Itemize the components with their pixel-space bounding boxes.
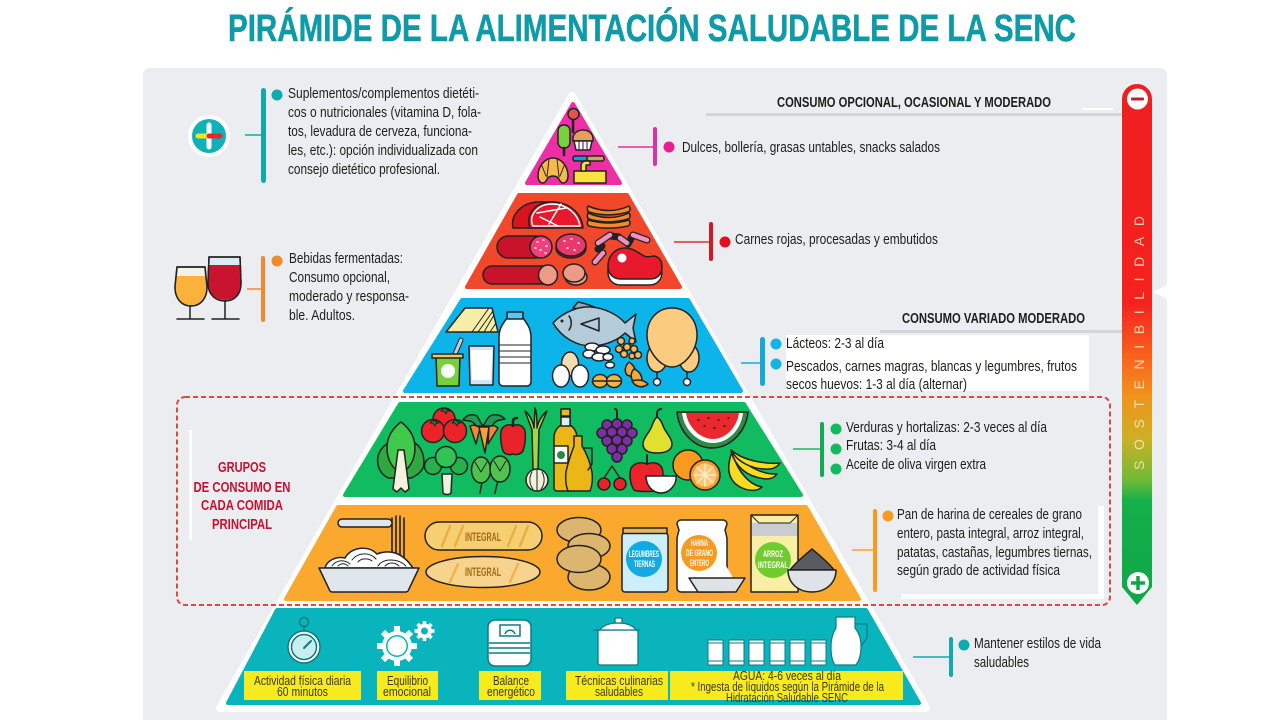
icon: pepper [501, 418, 525, 455]
label: agua: * Ingesta de líquidos según la Pirámide de la [691, 680, 884, 694]
icon: jar of legumes: TIERNAS [634, 559, 655, 569]
callout: estilos de vida: Mantener estilos de vida [974, 636, 1102, 652]
tier: carnes [467, 195, 680, 287]
icon: oranges [673, 450, 720, 490]
label: grupos de consumo: CADA COMIDA [201, 498, 283, 514]
label: grupos de consumo: DE CONSUMO EN [194, 480, 290, 496]
callout: suplementos: tos, levadura de cerveza, funciona- [288, 124, 472, 140]
callout: bebidas fermentadas: moderado y responsa- [289, 289, 409, 305]
icon: pasta bowl [319, 548, 419, 592]
callout: carnes [674, 222, 938, 261]
icon: flour bag: ENTERO [690, 558, 709, 568]
icon: popsicle [558, 125, 570, 155]
icon: milk bottle [499, 312, 531, 386]
heading: consumo variado [880, 311, 1123, 333]
callout: verduras y frutas: Verduras y hortalizas: 2-3 veces al día [846, 420, 1048, 436]
callout: cereales: Pan de harina de cereales de grano [897, 507, 1082, 523]
callout: suplementos: les, etc.): opción individualizada con [288, 143, 478, 159]
callout: bebidas fermentadas: Bebidas fermentadas: [289, 251, 403, 267]
label: actividad física: Actividad física diaria [254, 674, 351, 688]
label: equilibrio emocional [377, 671, 438, 700]
icon: salami slices [563, 264, 587, 285]
icon: knife [573, 156, 604, 161]
callout: suplementos icon [188, 115, 230, 157]
icon: croissant [538, 158, 568, 183]
icon: plus [1127, 572, 1149, 594]
icon: fork [338, 516, 404, 566]
icon: almond wedges [625, 362, 648, 387]
label: técnicas culinarias [566, 671, 668, 700]
icon: chicken [647, 308, 699, 386]
icon: pear [643, 409, 672, 453]
heading: consumo variado: CONSUMO VARIADO MODERADO [902, 311, 1085, 327]
sustainability bar [1122, 84, 1167, 605]
icon: steak [608, 248, 662, 285]
label: grupos de consumo: GRUPOS [218, 460, 266, 476]
icon: bowl of rice [788, 549, 836, 592]
icon: stopwatch [288, 618, 320, 663]
callout: bebidas fermentadas: Consumo opcional, [289, 270, 390, 286]
icon: peanuts [592, 374, 622, 388]
heading: consumo opcional [706, 95, 1123, 116]
icon: broccoli [424, 446, 468, 494]
icon: eggs [552, 352, 588, 387]
icon: brown rice box [751, 515, 798, 592]
callout: lácteos y proteínas: Lácteos: 2-3 al día [786, 336, 885, 352]
icon: brown rice box: INTEGRAL [758, 560, 788, 570]
icon: muffin [573, 130, 593, 150]
label: técnicas culinarias: saludables [595, 685, 643, 699]
icon: nuts [616, 338, 642, 359]
callout: lácteos y proteínas [741, 335, 1089, 393]
icon: wine glasses [175, 257, 241, 319]
icon: chard [378, 422, 424, 492]
tier: estilos de vida [228, 610, 919, 705]
pyramid silhouette [220, 96, 926, 708]
icon: minus [1127, 88, 1148, 110]
icon: bowl of flour [689, 560, 745, 592]
callout: estilos de vida [913, 636, 1102, 677]
icon: flour bag: DE GRANO [686, 548, 713, 558]
label: balance energético: Balance [493, 674, 529, 688]
icon: jar of legumes: LEGUMBRES [629, 549, 659, 559]
label: agua [670, 669, 903, 705]
tier: dulces [527, 104, 620, 183]
icon: olive oil bottle [554, 409, 577, 491]
icon: spring onion [525, 408, 548, 491]
label: técnicas culinarias: Técnicas culinarias [575, 674, 663, 688]
callout: cereales: según grado de actividad física [897, 563, 1061, 579]
heading: consumo opcional: CONSUMO OPCIONAL, OCASIONAL Y MODERADO [777, 95, 1051, 111]
callout: verduras y frutas: Frutas: 3-4 al día [846, 438, 937, 454]
icon: salami [497, 236, 552, 258]
icon: sausages [587, 206, 630, 228]
icon: grapes [597, 409, 637, 462]
icon: salami slice [556, 234, 586, 258]
callout: suplementos: consejo dietético profesional. [288, 162, 440, 178]
callout: lácteos y proteínas: Pescados, carnes magras, blancas y legumbres, frutos [786, 359, 1077, 375]
icon: cheese [446, 308, 498, 332]
label: equilibrio emocional: Equilibrio [387, 674, 428, 688]
icon: tomatoes [422, 408, 466, 442]
icon: butter [574, 161, 606, 183]
icon: white beans [583, 343, 614, 368]
callout: suplementos: cos o nutricionales (vitamina D, fola- [288, 105, 481, 121]
callout: estilos de vida: saludables [974, 655, 1029, 671]
tier: verduras y frutas [345, 404, 801, 495]
icon: water glasses [708, 640, 826, 665]
icon: glass of milk [469, 346, 494, 385]
tier: lácteos y proteínas [405, 300, 741, 391]
label: agua: Hidratación Saludable SENC [726, 691, 848, 705]
icon: whole grain baguette [425, 522, 542, 550]
callout: dulces [618, 127, 940, 166]
callout: cereales [852, 506, 1104, 599]
icon: oil cruet [566, 436, 592, 491]
icon: artichokes [472, 456, 510, 493]
icon: lollipop [568, 108, 579, 132]
callout: cereales: patatas, castañas, legumbres tiernas, [897, 545, 1092, 561]
callout: dulces: Dulces, bollería, grasas untables, snacks salados [682, 140, 940, 156]
callout: suplementos: Suplementos/complementos dietéti- [288, 86, 479, 102]
callout: carnes: Carnes rojas, procesadas y embutidos [735, 232, 938, 248]
icon: chorizo links [595, 235, 647, 262]
icon: flour bag: HARINA [691, 538, 708, 548]
icon: watermelon [677, 412, 748, 448]
icon: jug [831, 617, 867, 665]
icon: fish [553, 302, 636, 346]
callout: lácteos y proteínas: secos huevos: 1-3 al día (alternar) [786, 377, 967, 393]
icon: pot [593, 618, 640, 665]
icon: jar of legumes [622, 528, 668, 592]
label: equilibrio emocional: emocional [383, 685, 431, 699]
icon: cherries [598, 466, 626, 490]
callout: suplementos [245, 86, 481, 183]
callout: bebidas fermentadas: ble. Adultos. [289, 308, 355, 324]
icon: long salami [483, 265, 558, 285]
callout: cereales: entero, pasta integral, arroz integral, [897, 526, 1084, 542]
label: grupos de consumo [189, 430, 290, 540]
label: grupos de consumo: PRINCIPAL [212, 517, 272, 533]
tier: cereales [286, 507, 859, 599]
callout: verduras y frutas: Aceite de oliva virgen extra [846, 457, 987, 473]
label: sostenibilidad: SOSTENIBILIDAD [1131, 216, 1147, 470]
label: agua: AGUA: 4-6 veces al día [733, 669, 841, 683]
group outline: grupos de consumo [177, 397, 1110, 605]
icon: brown rice box: ARROZ [763, 549, 783, 559]
icon: whole grain loaf: INTEGRAL [465, 567, 501, 579]
label: balance energético [479, 671, 541, 700]
icon: potatoes [557, 518, 610, 590]
icon: ham [513, 202, 583, 228]
label: actividad física [244, 671, 361, 700]
label: balance energético: energético [487, 685, 535, 699]
icon: whole grain loaf [426, 556, 540, 588]
icon: flour bag [677, 520, 727, 592]
icon: gears [377, 621, 434, 666]
panel: background [143, 68, 1167, 720]
icon: carrots [463, 415, 505, 453]
icon: bananas [729, 450, 780, 490]
callout: verduras y frutas [793, 420, 1048, 477]
icon: scale [488, 620, 531, 666]
label: actividad física: 60 minutos [277, 685, 328, 699]
icon: apple [630, 455, 676, 493]
icon: yogurt [432, 340, 463, 386]
icon: whole grain baguette: INTEGRAL [465, 532, 501, 544]
callout: bebidas fermentadas [247, 251, 409, 324]
